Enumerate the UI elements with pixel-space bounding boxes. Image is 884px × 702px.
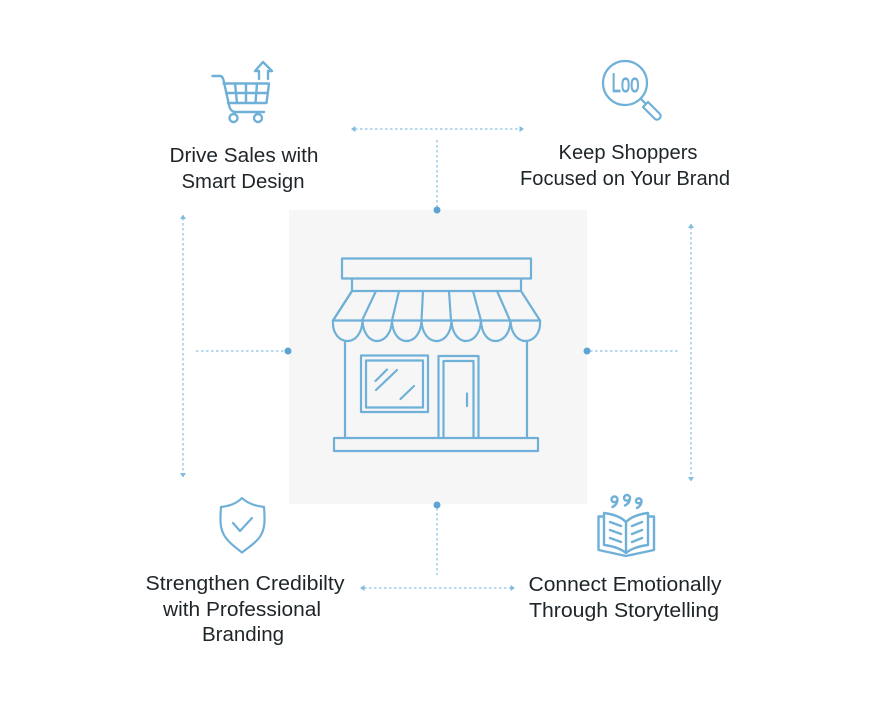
label: connect emotionally — [528, 574, 722, 622]
label: drive sales: Drive Sales with — [170, 145, 318, 167]
label: connect emotionally: Through Storytelling — [529, 600, 719, 622]
label: drive sales — [170, 145, 318, 193]
label: keep shoppers: Keep Shoppers — [558, 142, 698, 164]
icon: storefront — [333, 258, 540, 451]
label: strengthen credibility: Branding — [202, 624, 284, 646]
centre panel — [289, 210, 587, 504]
label: strengthen credibility: with Professional — [162, 599, 321, 621]
connector: right — [584, 224, 694, 482]
label: connect emotionally: Connect Emotionally — [528, 574, 722, 596]
label: drive sales: Smart Design — [182, 171, 304, 193]
label: strengthen credibility: Strengthen Credibilty — [146, 573, 344, 595]
icon: magnifying glass with logo: Loo — [612, 68, 640, 98]
connector: bottom — [360, 502, 515, 591]
label: strengthen credibility — [146, 573, 344, 646]
label: keep shoppers — [520, 142, 730, 190]
label: keep shoppers: Focused on Your Brand — [520, 168, 730, 190]
icon: shopping cart with up arrow — [212, 62, 272, 122]
connector: top — [351, 126, 524, 214]
connector: left — [180, 214, 292, 478]
icon: shield with check — [220, 498, 265, 552]
icon: magnifying glass with logo — [603, 61, 661, 120]
icon: open book with quote marks — [598, 495, 654, 556]
